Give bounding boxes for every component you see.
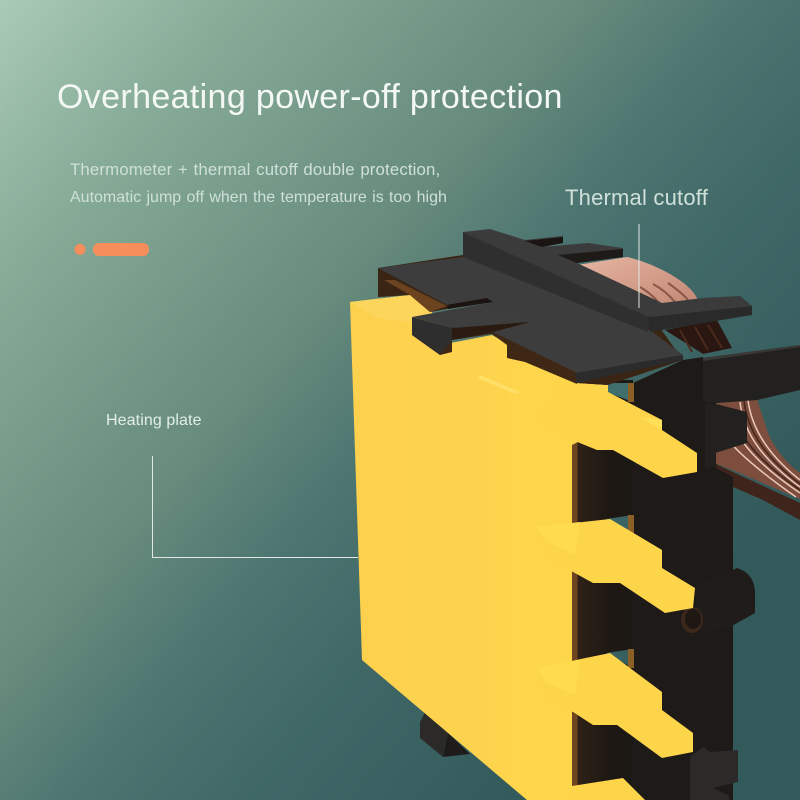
cylindrical boss on frame	[681, 568, 755, 633]
description text: Thermometer + thermal cutoff double protection,	[70, 160, 440, 179]
thermal cutoff top cover	[378, 255, 683, 385]
accent dot	[74, 244, 86, 255]
heating plate tab 3	[537, 653, 693, 758]
description text	[70, 160, 447, 206]
window gaps showing background	[606, 383, 634, 668]
upper copper coil	[577, 257, 732, 354]
black rear panel between tabs	[565, 380, 633, 800]
description text: Automatic jump off when the temperature is too high	[70, 189, 447, 206]
label: thermal cutoff: Thermal cutoff	[565, 185, 708, 210]
black frame column	[633, 345, 800, 800]
heating plate body	[350, 295, 640, 800]
bottom foot	[420, 712, 470, 757]
leader line: thermal cutoff	[638, 224, 640, 308]
label: heating plate: Heating plate	[106, 412, 202, 429]
lower frame clip	[690, 747, 738, 800]
title: Overheating power-off protection	[57, 78, 563, 116]
accent pill	[93, 243, 149, 256]
lower copper coil	[712, 399, 800, 520]
heating plate tab 4	[572, 778, 645, 800]
heating plate tab 2	[537, 519, 695, 613]
heating plate tab 1	[535, 385, 697, 478]
thermal cutoff raised bar	[463, 229, 752, 332]
leader line: heating plate	[152, 456, 358, 558]
